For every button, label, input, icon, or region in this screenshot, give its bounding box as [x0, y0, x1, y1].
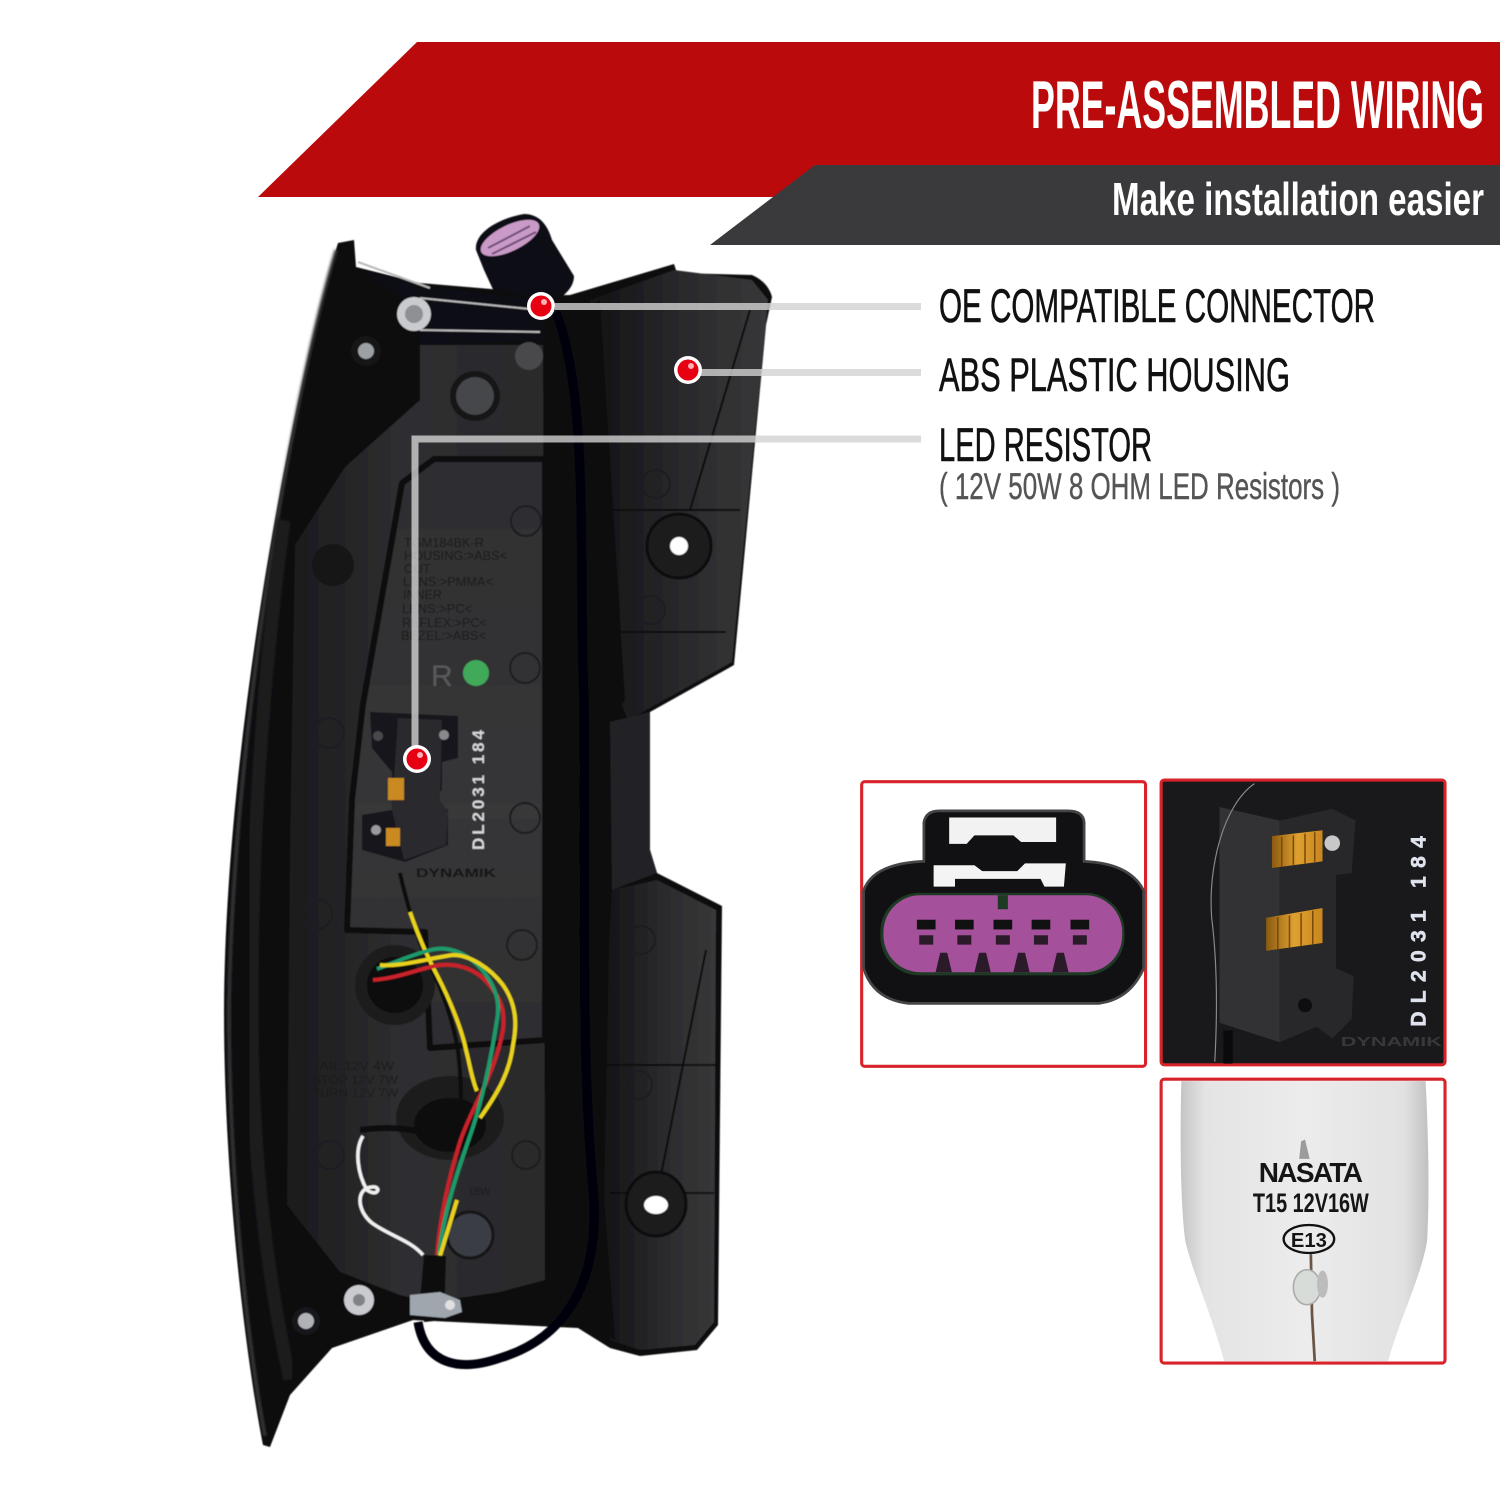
moulded circles [302, 470, 670, 1169]
label: housing: ABS PLASTIC HOUSING [939, 348, 1290, 401]
bulb marking: E13: E13 [1291, 1230, 1327, 1252]
outer lens band [252, 520, 290, 1380]
embossed material text: TGM184BK-R [404, 536, 484, 550]
recessed panel [347, 459, 545, 1048]
connector purple insert [880, 893, 1125, 975]
filament post [1293, 1139, 1328, 1361]
printed code: DL2031 184 [469, 729, 488, 850]
callout leader: connector [555, 303, 921, 310]
upper round plugs [312, 342, 543, 586]
wire sleeve [420, 1255, 446, 1322]
lens edge highlight [229, 250, 336, 1436]
bulb marking: E13 [1284, 1225, 1334, 1253]
bulb specification text [312, 1059, 491, 1198]
green sticker [463, 660, 489, 686]
DYNAMIK logo: DYNAMIK [416, 866, 496, 880]
lamp body silhouette [224, 240, 772, 1447]
embossed material text: BEZEL:>ABS< [401, 629, 486, 643]
right housing lower [600, 880, 716, 1350]
DYNAMIK logo close-up: DYNAMIK [1341, 1035, 1442, 1049]
callout leader: resistor [415, 439, 921, 748]
bulb specification text: 18W [468, 1186, 491, 1198]
label: resistor: LED RESISTOR [939, 418, 1152, 471]
red wire [373, 965, 504, 1255]
dark subtitle banner [710, 165, 1500, 245]
embossed material text: LENS:>PC< [402, 602, 472, 616]
right housing upper [590, 270, 768, 720]
lower stud [344, 1285, 374, 1315]
bulb specification text: TURN 12V 7W [312, 1086, 399, 1100]
glass bulb [1181, 1081, 1428, 1361]
housing strap lines [600, 310, 750, 1193]
lower round plug [447, 1212, 493, 1258]
embossed material text: REFLEX:>PC< [402, 616, 487, 630]
embossed material text: OUT [404, 562, 431, 576]
bulb specification text: TAIL 12V 4W [312, 1059, 395, 1073]
connector shell [864, 811, 1144, 1003]
black centre channel [545, 300, 625, 1340]
marker dot: resistor [403, 745, 431, 773]
black wire [400, 873, 461, 1122]
tail light product illustration [224, 212, 772, 1447]
top nut [397, 297, 431, 331]
wire clamp [410, 1292, 462, 1318]
inset panel: resistor close-up [1161, 780, 1445, 1065]
bulb specification text: STOP 12V 7W [312, 1073, 399, 1087]
upper housing mount [647, 514, 711, 578]
callout leader: housing [700, 369, 921, 376]
upper screw [351, 336, 381, 366]
bulb marking: brand: NASATA [1259, 1157, 1363, 1188]
main back panel [287, 345, 545, 1302]
embossed material text [401, 536, 507, 643]
embossed material text: HOUSING:>ABS< [404, 549, 507, 563]
printed code close-up: DL2031 184 [1408, 836, 1431, 1027]
yellow wire one [410, 912, 477, 1091]
wiring connector plug on top [476, 212, 574, 312]
resistor on lamp [362, 712, 458, 862]
top bracket rail [358, 268, 545, 345]
yellow wire two [380, 955, 515, 1118]
label: resistor specification: ( 12V 50W 8 OHM LED Resistors ) [939, 466, 1340, 507]
embossed material text: INNER [403, 588, 442, 602]
connector clip [934, 817, 1066, 887]
wire grommet [355, 945, 435, 1025]
slim housing wire [418, 312, 594, 1365]
green wire [377, 949, 498, 1255]
yellow wire lower [440, 1200, 457, 1256]
lower housing mount [626, 1172, 686, 1236]
R mark: R [431, 660, 453, 693]
marker dot: housing [674, 356, 702, 384]
resistor body [1211, 784, 1356, 1064]
white wire [358, 1136, 423, 1255]
red title banner [258, 42, 1500, 197]
inset panel: connector close-up [862, 782, 1146, 1066]
marker dot: connector [527, 292, 555, 320]
black harness cable [360, 1128, 450, 1142]
embossed material text: LENS:>PMMA< [403, 575, 493, 589]
inset panel: bulb close-up [1161, 1079, 1445, 1363]
lower screw [292, 1307, 320, 1335]
housing neck [610, 712, 657, 890]
lower grommet [396, 1076, 504, 1160]
bulb marking: rating: T15 12V16W [1253, 1187, 1369, 1218]
